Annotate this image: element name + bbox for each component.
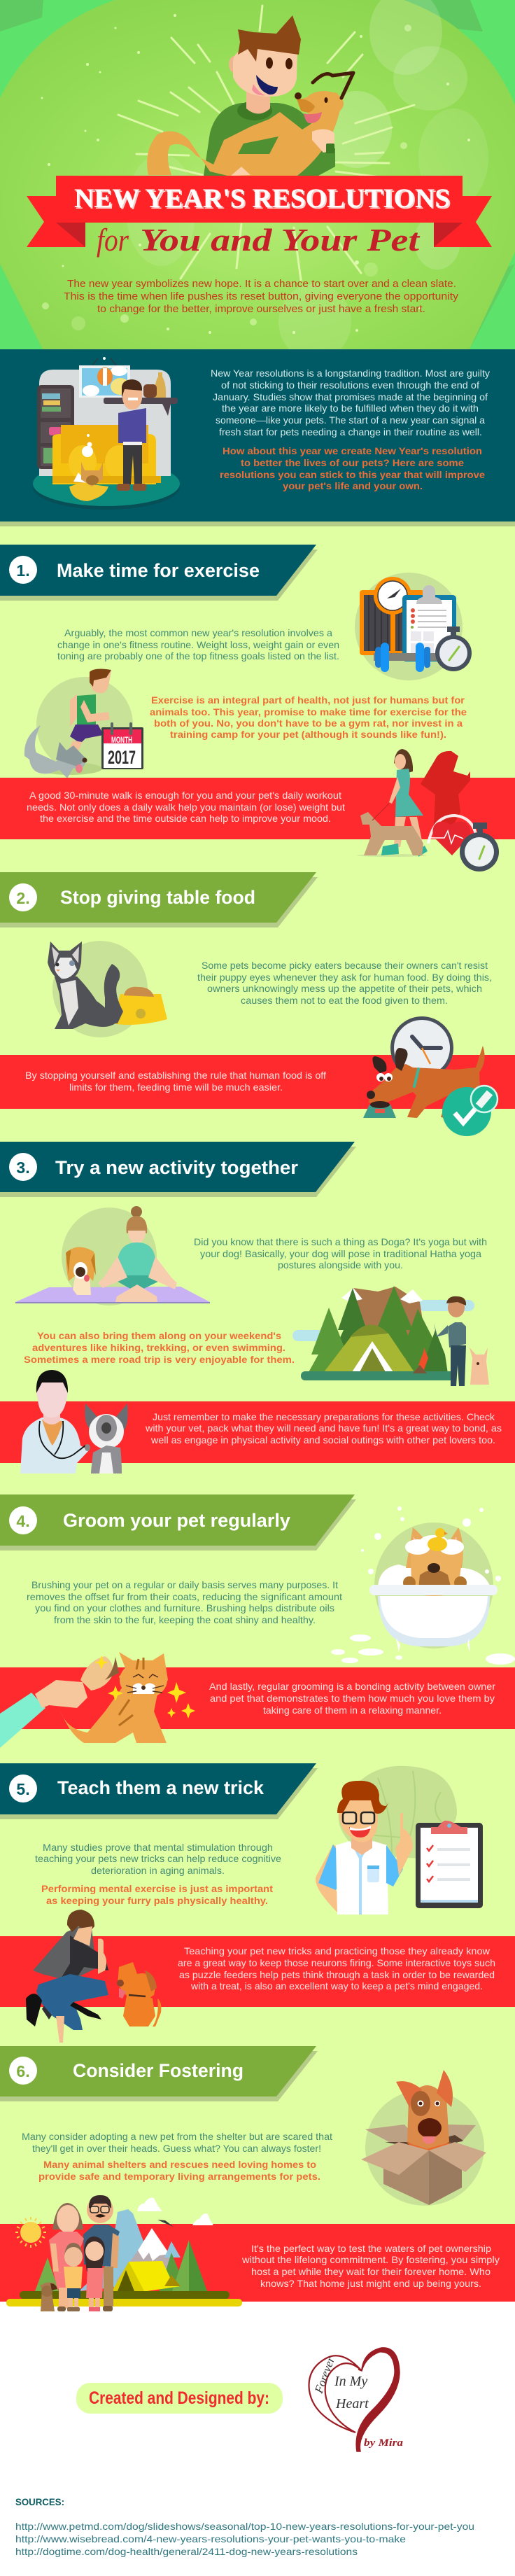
heading: section 4 xyxy=(0,1494,356,1550)
intro callout: your pet's life and your own. xyxy=(283,480,423,491)
text: section 1 intro: toning are probably one of the top fitness goals listed on the list. xyxy=(57,650,339,662)
logo: forever in my heart: Heart xyxy=(335,2396,369,2412)
callout: section 6: Many animal shelters and rescues need loving homes to xyxy=(43,2159,316,2170)
red band: section 3 xyxy=(0,1401,515,1463)
red band: section 6: knows? That home just might end up being yours. xyxy=(260,2278,481,2289)
callout: section 6 xyxy=(38,2159,320,2182)
panel: section 3 xyxy=(0,1142,515,1474)
sources: http://www.wisebread.com/4-new-years-resolutions-your-pet-wants-you-to-make xyxy=(15,2533,406,2544)
red band: section 3: Just remember to make the necessary preparations for these activities. Check xyxy=(153,1411,495,1422)
heading: section 6: Consider Fostering xyxy=(73,2060,244,2081)
subtitle xyxy=(97,222,421,258)
text: section 2 intro xyxy=(197,960,492,1006)
illustration: man with glasses, brain and clipboard xyxy=(316,1766,483,1914)
panel: section 2 xyxy=(0,872,515,1136)
text: section 3 intro: Did you know that there is such a thing as Doga? It's yoga but with xyxy=(194,1236,487,1247)
callout: section 5: as keeping your furry pals physically healthy. xyxy=(46,1895,268,1906)
illustration: man jogging with dog and calendar xyxy=(24,669,143,778)
sources xyxy=(15,2496,474,2557)
intro text: to change for the better, improve ourselves or just have a fresh start. xyxy=(97,303,425,315)
red band: section 6 xyxy=(0,2224,515,2302)
intro paragraph: of not sticking to their resolutions even through the end of xyxy=(221,379,479,391)
text: section 1 intro: Arguably, the most common new year's resolution involves a xyxy=(64,627,332,638)
text: section 4 intro: removes the offset fur from their coats, reducing the significant amount xyxy=(27,1591,342,1602)
intro text: This is the time when life pushes its reset button, giving everyone the opportunity xyxy=(64,290,459,302)
red band: section 3: with your vet, pack what they will need and have fun! It's a great way to bond, as xyxy=(145,1422,502,1434)
red band: section 6: without the lifelong commitment. By fostering, you simply xyxy=(241,2254,500,2265)
panel: header xyxy=(0,0,515,360)
illustration: cat and food bowl xyxy=(48,941,167,1037)
heading: section 3: 3. xyxy=(16,1158,30,1177)
red band: section 4: and pet that demonstrates to them how much you love them by xyxy=(210,1693,495,1704)
logo: forever in my heart xyxy=(309,2348,404,2451)
panel: section 5 xyxy=(0,1763,515,2043)
illustration: woman walking dog, runner, heart and stopwatch xyxy=(357,749,499,872)
text: section 6 intro xyxy=(22,2131,332,2154)
text: section 6 intro: they'll get in over their heads. Guess what? You can always foster! xyxy=(32,2143,321,2154)
intro callout: to better the lives of our pets? Here are some xyxy=(241,457,464,468)
illustration: dog eating from bowl with clock and check mark xyxy=(363,1016,498,1136)
callout: section 1: training camp for your pet (although it sounds like fun!). xyxy=(170,729,446,740)
red band: section 6: It's the perfect way to test the waters of pet ownership xyxy=(251,2243,491,2254)
text: section 3 intro: postures alongside with you. xyxy=(278,1259,403,1270)
illustration: man holding dog xyxy=(147,15,353,176)
callout: section 3: Sometimes a mere road trip is very enjoyable for them. xyxy=(24,1354,295,1365)
callout: section 1: Exercise is an integral part of health, not just for humans but for xyxy=(151,694,465,706)
text: section 5 intro xyxy=(35,1842,281,1876)
heading: section 1: 1. xyxy=(16,561,30,580)
intro paragraph xyxy=(211,368,490,438)
intro callout: How about this year we create New Year's resolution xyxy=(223,445,482,456)
red band: section 5 xyxy=(0,1936,515,2007)
illustration: vet and dog xyxy=(20,1370,128,1474)
callout: section 1: both of you. No, you don't have to be a gym rat, nor invest in a xyxy=(154,718,463,729)
callout: section 3 xyxy=(24,1330,295,1365)
text: section 3 intro xyxy=(194,1236,487,1270)
credit pill xyxy=(76,2383,283,2414)
text: section 2 intro: causes them not to eat the food given to them. xyxy=(241,995,448,1006)
callout: section 5 xyxy=(41,1883,273,1906)
heading: section 2: 2. xyxy=(16,889,30,907)
logo: forever in my heart: by Mira xyxy=(364,2437,404,2449)
intro paragraph: fresh start for pets needing a change in their routine as well. xyxy=(219,426,482,438)
text: section 4 intro: Brushing your pet on a regular or daily basis serves many purposes. It xyxy=(31,1579,338,1590)
heading: section 4: Groom your pet regularly xyxy=(63,1510,290,1531)
intro text xyxy=(64,278,459,315)
red band: section 5: with a treat, is also an excellent way to keep a pet's mind engaged. xyxy=(190,1980,483,1991)
heading: section 3 xyxy=(0,1142,356,1197)
illustration: dog in a cardboard box xyxy=(361,2070,486,2206)
title: NEW YEAR'S RESOLUTIONS xyxy=(74,183,450,214)
red band: section 5: are a great way to keep those neurons firing. Some interactive toys such xyxy=(178,1957,495,1968)
heading: section 1: Make time for exercise xyxy=(57,560,260,581)
panel: section 6 xyxy=(0,2046,515,2311)
callout: section 5: Performing mental exercise is just as important xyxy=(41,1883,273,1894)
text: section 4 intro xyxy=(27,1579,342,1625)
logo: forever in my heart: Forever xyxy=(312,2355,337,2395)
red band: section 3: well as engage in physical activity and social outings with other pet lovers too. xyxy=(150,1434,495,1446)
red band: section 4 xyxy=(0,1667,515,1729)
illustration: hand brushing cat xyxy=(0,1652,195,1748)
callout: section 3: You can also bring them along on your weekend's xyxy=(37,1330,281,1341)
text: section 3 intro: your dog! Basically, your dog will pose in traditional Hatha yoga xyxy=(200,1248,481,1259)
illustration: man kneeling teaching dog xyxy=(26,1910,161,2043)
red band: section 1: the exercise and the time outside can help to improve your mood. xyxy=(40,813,331,824)
illustration: living room with man and dog xyxy=(33,357,180,510)
title ribbon xyxy=(27,176,492,247)
panel: section 4 xyxy=(0,1494,515,1748)
sources: http://dogtime.com/dog-health/general/2411-dog-new-years-resolutions xyxy=(15,2546,358,2557)
red band: section 6: host a pet while they wait for their forever home. Who xyxy=(251,2266,491,2277)
red band: section 5: Teaching your pet new tricks and practicing those they already know xyxy=(184,1945,491,1956)
callout: section 6: provide safe and temporary living arrangements for pets. xyxy=(38,2171,320,2182)
heading: section 2 xyxy=(0,872,318,927)
text: section 5 intro: teaching your pets new tricks can help reduce cognitive xyxy=(35,1853,281,1864)
illustration: camping scene with man and dog xyxy=(292,1286,489,1386)
icon: sun xyxy=(15,2217,46,2248)
panel: footer xyxy=(15,2348,474,2557)
text: section 4 intro: from the skin to the fur, keeping the coat shiny and healthy. xyxy=(54,1614,316,1625)
callout: section 1: animals too. This year, promise to make time for exercise for the xyxy=(150,706,467,718)
heading: section 5: 5. xyxy=(16,1780,30,1798)
intro callout xyxy=(220,445,485,491)
callout: section 3: adventures like hiking, trekking, or even swimming. xyxy=(32,1342,285,1353)
illustration: yoga with dog xyxy=(15,1206,210,1306)
callout: section 1 xyxy=(150,694,467,740)
heading: section 6 xyxy=(0,2046,318,2101)
intro paragraph: someone—like your pets. The start of a new year can signal a xyxy=(216,414,485,426)
intro paragraph: the year are more likely to be fulfilled when they do it with xyxy=(222,402,479,414)
intro paragraph: January. Studies show that promises made at the beginning of xyxy=(213,391,488,402)
panel: section 1 xyxy=(0,545,515,872)
text: section 6 intro: Many consider adopting a new pet from the shelter but are scared that xyxy=(22,2131,332,2142)
red band: section 1 xyxy=(0,778,515,839)
sources: http://www.petmd.com/dog/slideshows/seasonal/top-10-new-years-resolutions-for-your-pet-you xyxy=(15,2521,474,2532)
heading: section 3: Try a new activity together xyxy=(55,1157,299,1178)
logo: forever in my heart: In My xyxy=(334,2374,367,2389)
red band: section 2: limits for them, feeding time will be much easier. xyxy=(69,1082,283,1093)
text: section 2 intro: their puppy eyes whenever they ask for human food. By doing this, xyxy=(197,972,492,983)
illustration: dog in bathtub xyxy=(331,1506,515,1665)
text: section 5 intro: deterioration in aging animals. xyxy=(91,1865,225,1876)
heading: section 6: 6. xyxy=(16,2062,30,2080)
heading: section 5 xyxy=(0,1763,318,1819)
text: section 2 intro: Some pets become picky eaters because their owners can't resist xyxy=(202,960,488,971)
panel: intro teal band xyxy=(0,349,515,526)
red band: section 1: needs. Not only does a daily walk help you maintain (or lose) weight but xyxy=(27,802,345,813)
heading: section 2: Stop giving table food xyxy=(60,887,255,908)
heading: section 4: 4. xyxy=(16,1512,30,1530)
heading: section 5: Teach them a new trick xyxy=(57,1777,264,1798)
red band: section 1: A good 30-minute walk is enough for you and your pet's daily workout xyxy=(29,790,341,801)
red band: section 2: By stopping yourself and establishing the rule that human food is off xyxy=(25,1070,326,1081)
subtitle: for xyxy=(97,222,129,258)
text: section 2 intro: owners unknowingly mess up the appetite of their pets, which xyxy=(207,983,482,994)
intro paragraph: New Year resolutions is a longstanding tradition. Most are guilty xyxy=(211,368,490,379)
red band: section 4: taking care of them in a relaxing manner. xyxy=(263,1704,442,1716)
text: section 1 intro: change in one's fitness routine. Weight loss, weight gain or even xyxy=(57,639,339,650)
subtitle: You and Your Pet xyxy=(140,223,421,258)
red band: section 4: And lastly, regular grooming is a bonding activity between owner xyxy=(209,1681,495,1692)
intro text: The new year symbolizes new hope. It is a chance to start over and a clean slate. xyxy=(67,278,456,290)
sources: SOURCES: xyxy=(15,2496,64,2507)
text: section 1 intro xyxy=(57,627,339,662)
icon: fitness scale, clipboard, dumbbell and stopwatch xyxy=(355,573,472,680)
illustration: man jogging with dog and calendar: 2017 xyxy=(108,747,136,768)
text: section 5 intro: Many studies prove that mental stimulation through xyxy=(43,1842,273,1853)
illustration: family camping with dog xyxy=(6,2195,242,2311)
text: section 4 intro: you find on your clothes and furniture. Brushing helps distribute oils xyxy=(35,1602,334,1614)
red band: section 5: as puzzle feeders help pets think through a task in order to be rewarded xyxy=(179,1969,495,1980)
heading: section 1 xyxy=(0,545,318,601)
illustration: man jogging with dog and calendar: MONTH xyxy=(111,735,132,745)
credit pill: Created and Designed by: xyxy=(89,2388,269,2408)
red band: section 2 xyxy=(0,1055,515,1109)
intro callout: resolutions you can stick to this year that will improve xyxy=(220,469,485,480)
